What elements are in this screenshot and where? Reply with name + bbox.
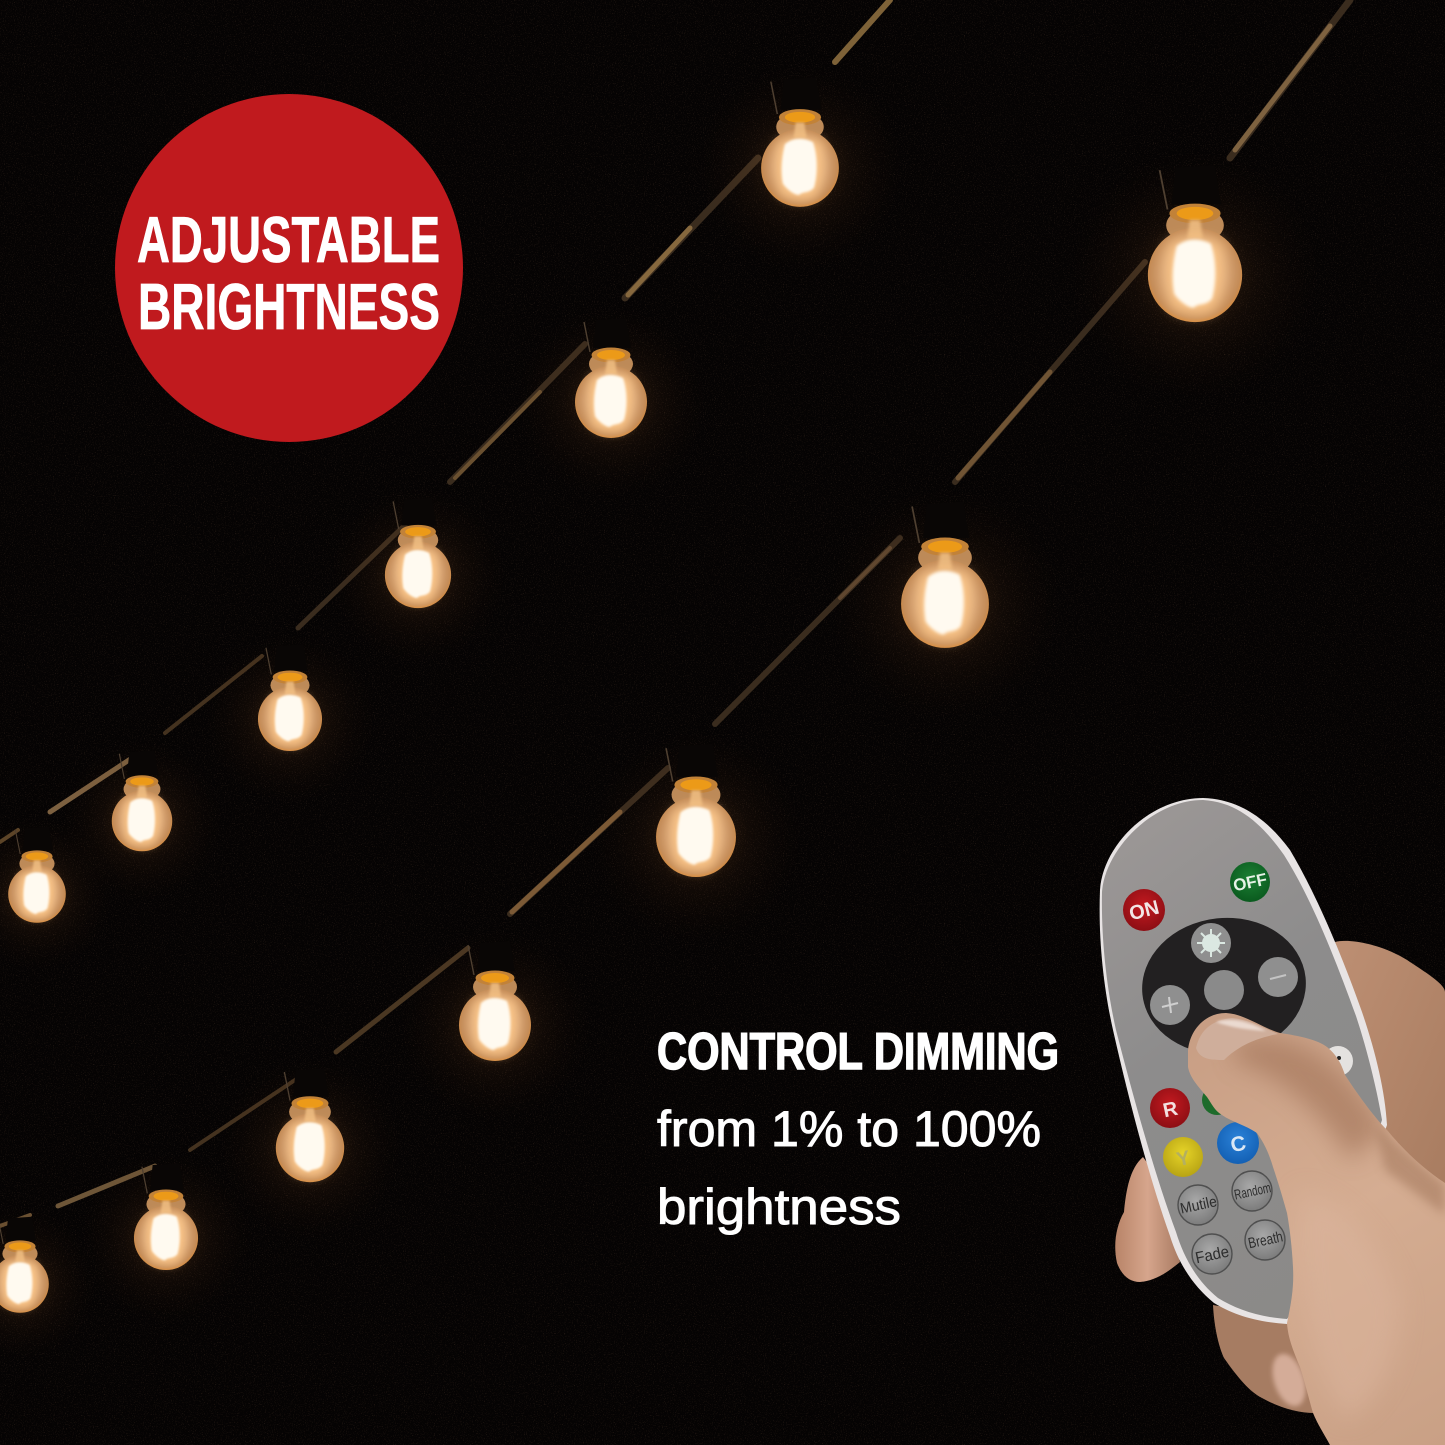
thumbnail — [1196, 1018, 1278, 1060]
badge: adjustable brightness: BRIGHTNESS — [138, 270, 440, 343]
remote body — [1100, 798, 1387, 1324]
lower string light wire — [0, 0, 1350, 1226]
caption: control dimming: from 1% to 100% — [657, 1101, 1041, 1157]
badge: adjustable brightness: ADJUSTABLE — [137, 203, 440, 276]
button: off — [1230, 862, 1270, 902]
badge: adjustable brightness — [115, 94, 463, 442]
button: mutile — [1178, 1185, 1218, 1225]
caption: control dimming — [657, 1023, 1059, 1235]
button: off: OFF — [1232, 870, 1269, 895]
caption: control dimming: brightness — [657, 1179, 901, 1235]
caption: control dimming: CONTROL DIMMING — [657, 1023, 1059, 1081]
button: green — [1202, 1085, 1232, 1115]
upper string light wire — [0, 0, 890, 842]
hand: fingers behind remote — [1115, 941, 1445, 1413]
button: random — [1232, 1171, 1272, 1211]
button: on — [1123, 889, 1165, 931]
crease shading — [1375, 1125, 1445, 1215]
button: white — [1323, 1046, 1353, 1076]
button: breath — [1245, 1220, 1285, 1260]
button: fade: Fade — [1194, 1244, 1231, 1267]
remote control — [1100, 798, 1387, 1324]
button: breath: Breath — [1247, 1228, 1284, 1252]
button: red: R — [1161, 1098, 1180, 1122]
button: cyan — [1217, 1122, 1259, 1164]
button: yellow — [1163, 1137, 1203, 1177]
dimming dial — [1135, 910, 1313, 1062]
palm highlight — [1324, 1271, 1388, 1400]
button: red — [1150, 1088, 1190, 1128]
button: yellow: Y — [1175, 1147, 1193, 1171]
button: on: ON — [1127, 897, 1161, 925]
thumb shading — [1235, 1038, 1385, 1160]
bulbs: lower string — [0, 151, 1319, 1360]
button: cyan: C — [1229, 1132, 1248, 1157]
hand: thumb and palm in front of remote — [1188, 1013, 1445, 1445]
bulbs: upper string — [0, 65, 903, 970]
nail highlight — [1216, 1020, 1266, 1031]
button: random: Random — [1233, 1179, 1272, 1203]
button: mutile: Mutile — [1179, 1193, 1218, 1218]
button: fade — [1192, 1234, 1232, 1274]
